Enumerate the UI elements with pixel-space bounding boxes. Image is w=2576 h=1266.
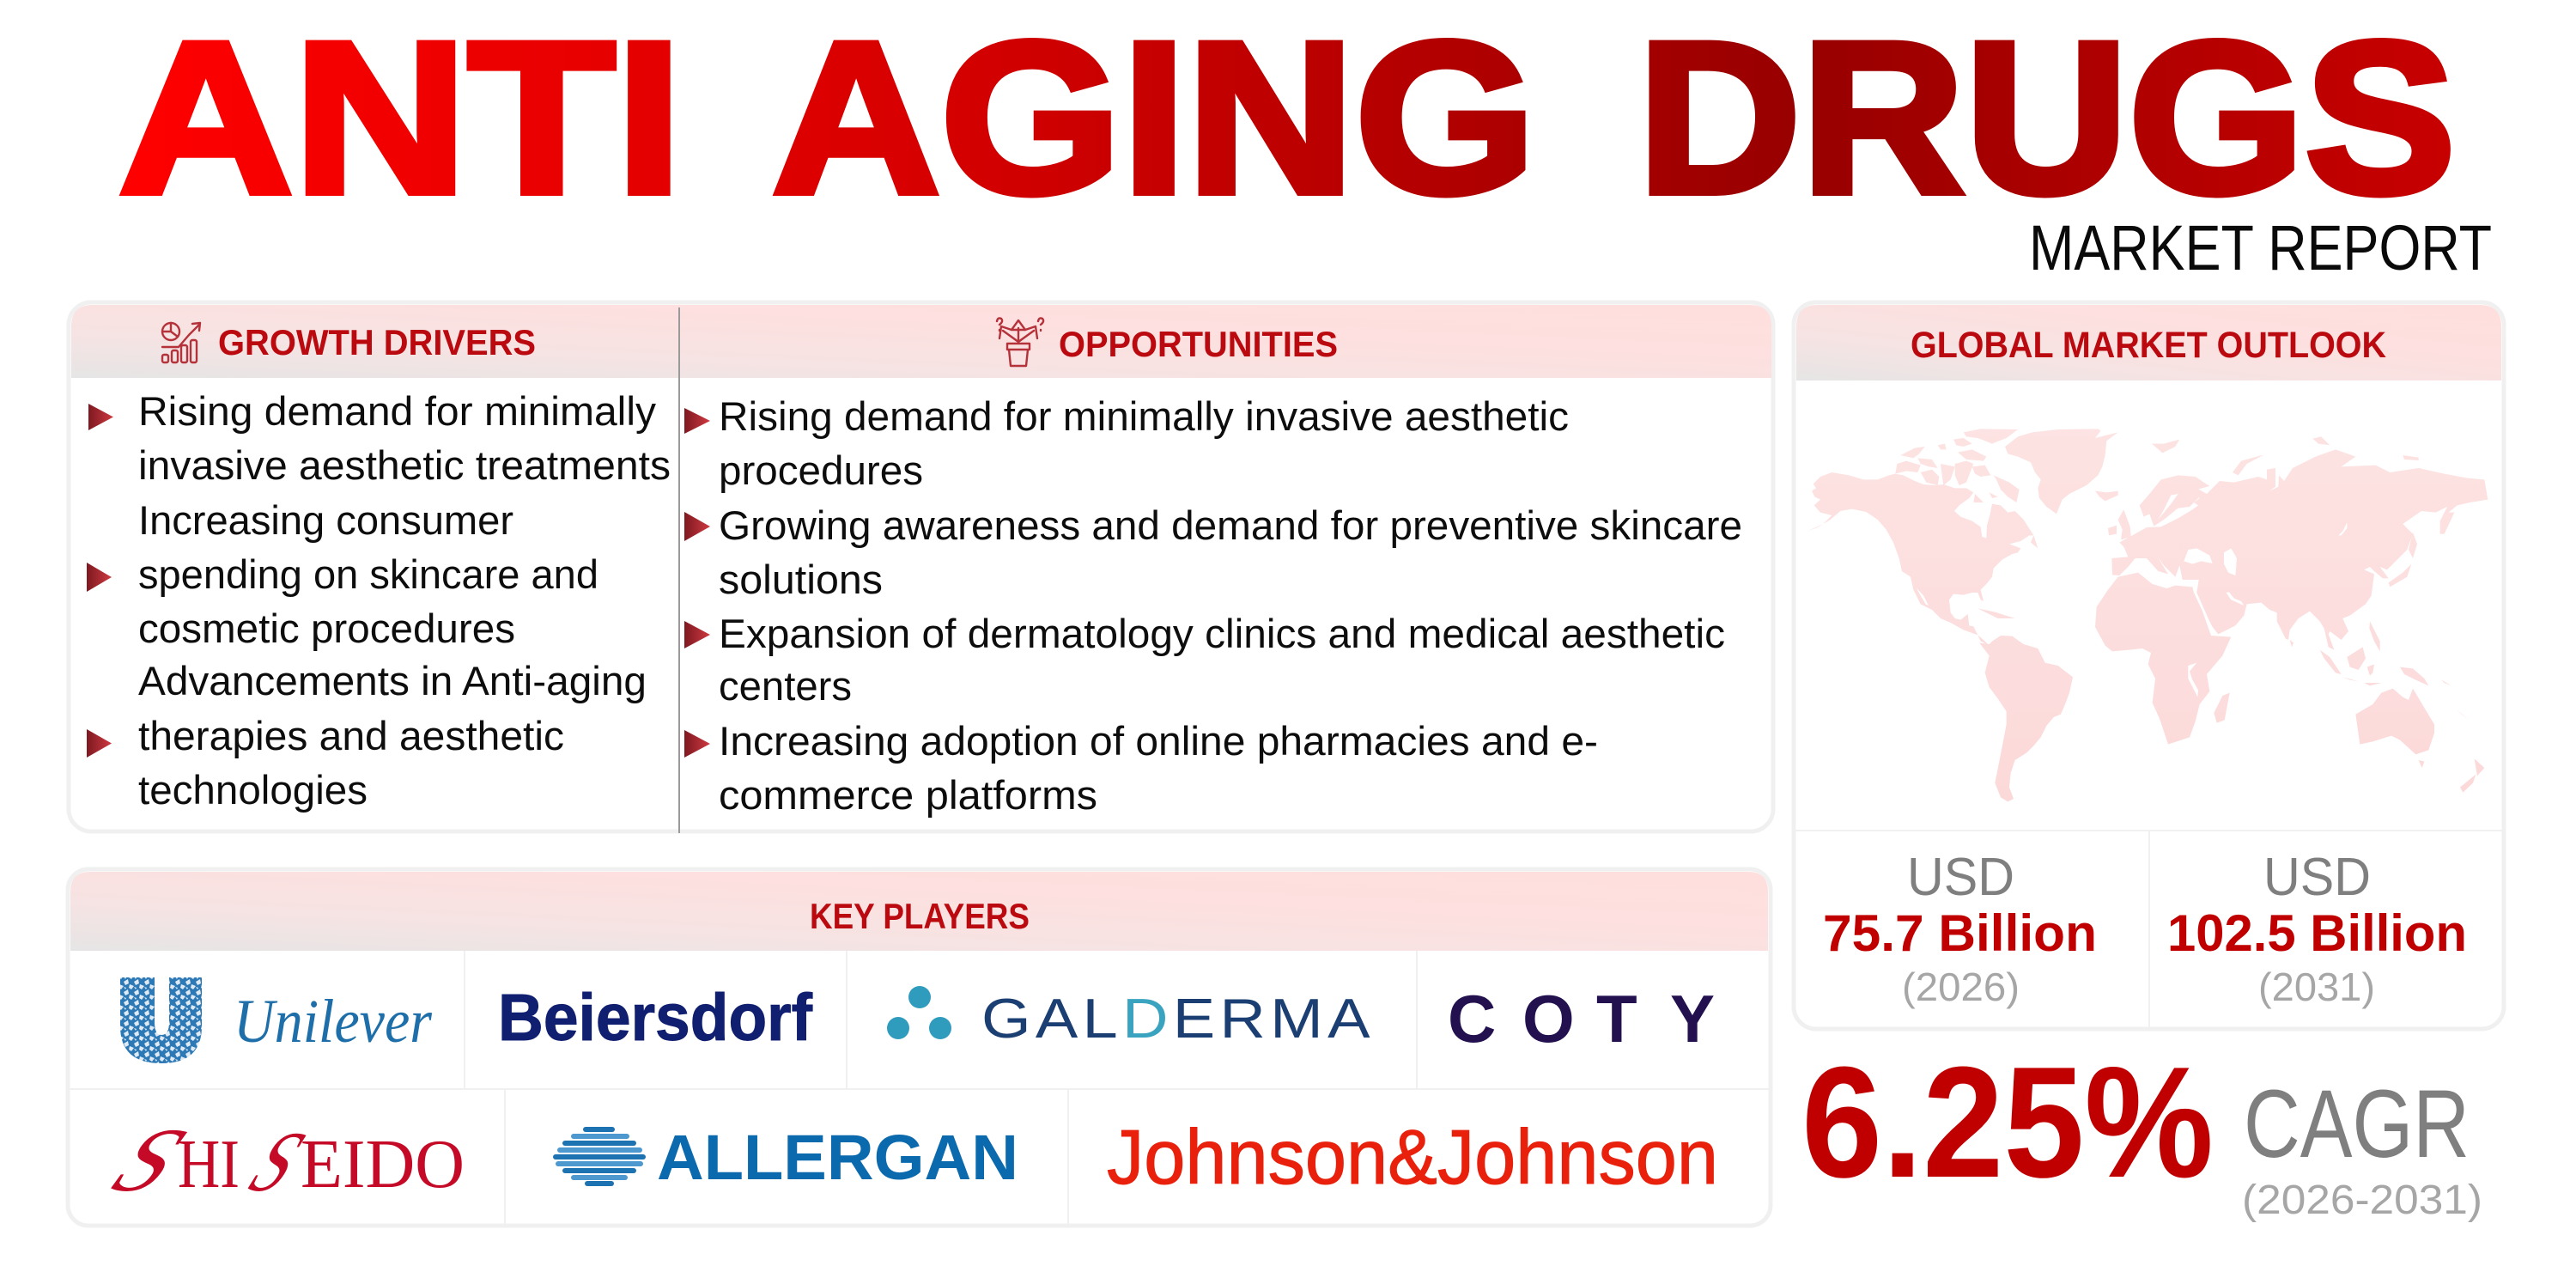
currency label: USD xyxy=(2263,848,2371,907)
logo: Beiersdorf: Beiersdorf xyxy=(498,981,812,1055)
opportunity line 2: procedures xyxy=(719,447,923,493)
Allergan wordmark: ALLERGAN xyxy=(657,1122,1018,1193)
logo: Coty: COTY xyxy=(1448,981,1715,1056)
list: growth drivers xyxy=(87,388,671,813)
driver line 3: Increasing consumer xyxy=(138,497,513,543)
bullet 3 xyxy=(684,621,710,648)
opportunity line 3: Growing awareness and demand for preventive skincare xyxy=(719,502,1742,548)
Unilever wordmark: Unilever xyxy=(234,987,433,1056)
outlook header band xyxy=(1796,305,2501,380)
Galderma wordmark: GALDERMA xyxy=(981,987,1370,1050)
CAGR label: CAGR xyxy=(2244,1070,2470,1178)
market value: 75.7 Billion xyxy=(1823,904,2097,962)
title xyxy=(118,0,2456,239)
opportunity line 4: solutions xyxy=(719,557,883,602)
column divider xyxy=(678,307,680,833)
driver line 6: Advancements in Anti-aging xyxy=(138,658,647,703)
driver line 5: cosmetic procedures xyxy=(138,606,515,651)
title: ANTI xyxy=(118,0,683,239)
market value: 102.5 Billion xyxy=(2167,904,2467,962)
panel header band xyxy=(71,305,1771,378)
bullet 2 xyxy=(684,512,710,541)
CAGR value: 6.25% xyxy=(1801,1033,2214,1210)
title: DRUGS xyxy=(1637,0,2456,239)
title: AGING xyxy=(772,0,1536,239)
bullet 3 xyxy=(87,729,112,758)
Shiseido first S: S xyxy=(88,1110,212,1210)
subtitle: MARKET REPORT xyxy=(2029,212,2492,283)
logo: Allergan xyxy=(556,1122,1018,1193)
key players header band xyxy=(70,872,1768,951)
logo: Galderma xyxy=(887,986,1370,1050)
value block: 2026 xyxy=(1823,848,2097,1009)
heading: opportunities: OPPORTUNITIES xyxy=(1059,324,1338,364)
Allergan globe stripes xyxy=(556,1129,643,1184)
bullet 1 xyxy=(88,404,113,430)
bullet 2 xyxy=(87,563,112,592)
CAGR callout xyxy=(1801,1033,2482,1223)
heading: key players: KEY PLAYERS xyxy=(810,896,1030,936)
year: (2026) xyxy=(1902,965,2020,1009)
icon: growth chart xyxy=(162,323,200,362)
Unilever U mark xyxy=(120,977,202,1063)
opportunity line 1: Rising demand for minimally invasive aesthetic xyxy=(719,393,1569,439)
panel: key players xyxy=(68,869,1771,1226)
Shiseido HI: HI xyxy=(178,1127,240,1202)
opportunity line 8: commerce platforms xyxy=(719,772,1097,818)
Shiseido EIDO: EIDO xyxy=(301,1127,465,1202)
driver line 7: therapies and aesthetic xyxy=(138,713,564,758)
logo: Johnson and Johnson: Johnson&Johnson xyxy=(1107,1115,1718,1201)
opportunity line 7: Increasing adoption of online pharmacies and e- xyxy=(719,718,1598,764)
bullet 1 xyxy=(684,408,710,434)
panel: global market outlook xyxy=(1794,302,2504,1029)
value block: 2031 xyxy=(2167,848,2467,1009)
driver line 2: invasive aesthetic treatments xyxy=(138,442,671,488)
bullet 4 xyxy=(684,730,710,758)
heading: global market outlook: GLOBAL MARKET OUTLOOK xyxy=(1911,325,2386,366)
map: Eurasia, Africa and Oceania xyxy=(2095,436,2488,793)
panel: growth drivers and opportunities xyxy=(69,302,1773,833)
logo: Shiseido xyxy=(88,1110,465,1210)
opportunity line 6: centers xyxy=(719,663,852,709)
list: opportunities xyxy=(684,393,1742,818)
world map xyxy=(1807,429,2488,801)
Shiseido second S: S xyxy=(230,1115,325,1209)
CAGR period: (2026-2031) xyxy=(2242,1178,2482,1223)
Galderma dots xyxy=(887,986,951,1039)
year: (2031) xyxy=(2258,965,2375,1009)
logo: Unilever xyxy=(120,977,433,1063)
icon: opportunities xyxy=(997,318,1043,366)
heading: growth drivers: GROWTH DRIVERS xyxy=(218,322,536,362)
map: Americas and Greenland xyxy=(1807,429,2131,801)
driver line 1: Rising demand for minimally xyxy=(138,388,657,434)
driver line 4: spending on skincare and xyxy=(138,551,598,597)
currency label: USD xyxy=(1907,848,2014,907)
opportunity line 5: Expansion of dermatology clinics and medical aesthetic xyxy=(719,611,1725,656)
driver line 8: technologies xyxy=(138,767,368,813)
